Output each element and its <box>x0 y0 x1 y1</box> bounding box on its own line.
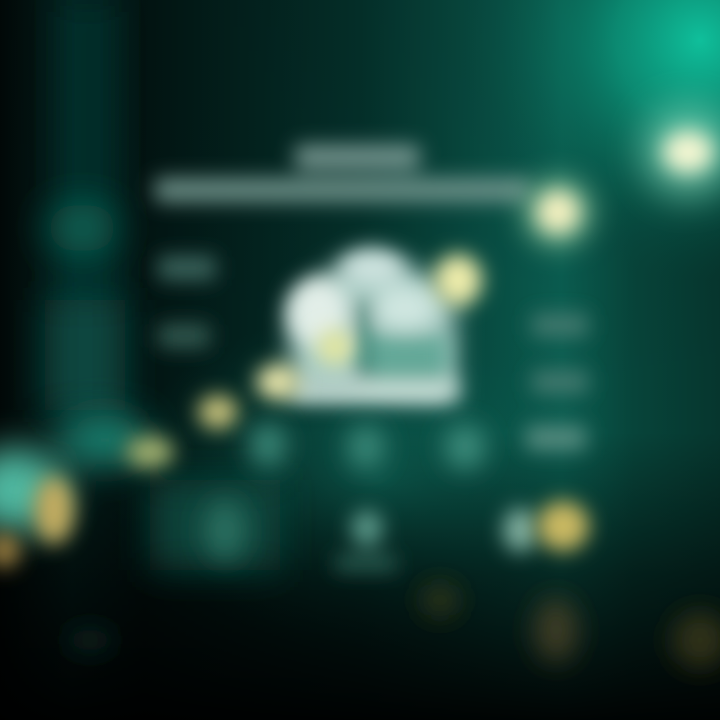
icon row <box>250 423 485 469</box>
glow: chart peak <box>434 254 482 306</box>
label 1 <box>158 256 216 280</box>
label 5 <box>526 426 586 450</box>
glow: left point <box>34 476 74 544</box>
glow: upper chart point <box>520 174 596 250</box>
central bright chart cluster <box>288 250 457 400</box>
lower item 3 <box>503 508 537 552</box>
lower item 2 <box>335 510 397 570</box>
label 3 <box>532 314 588 336</box>
glow: centre point <box>317 329 353 365</box>
title <box>155 145 530 202</box>
icon 3 <box>445 425 485 469</box>
glow: low point <box>256 364 300 400</box>
title line 1 <box>295 145 420 169</box>
left teal glow <box>0 414 280 570</box>
lower glow yellow <box>537 501 589 551</box>
glow: far left point <box>0 532 20 568</box>
right labels <box>526 314 588 450</box>
vertical teal band left <box>45 0 125 420</box>
lower item 1 <box>205 500 245 560</box>
glow: rising point <box>198 395 238 429</box>
icon 1 <box>250 423 286 467</box>
glow: rising point 2 <box>126 436 174 468</box>
left labels <box>158 256 216 348</box>
title line 2 <box>155 178 530 202</box>
lower row items <box>205 500 589 570</box>
growth trend dots <box>0 106 720 568</box>
icon 2 <box>348 425 384 469</box>
label 2 <box>158 324 210 348</box>
faint bottom glows <box>66 584 720 668</box>
label 4 <box>532 371 588 393</box>
glow: top right <box>642 106 720 198</box>
